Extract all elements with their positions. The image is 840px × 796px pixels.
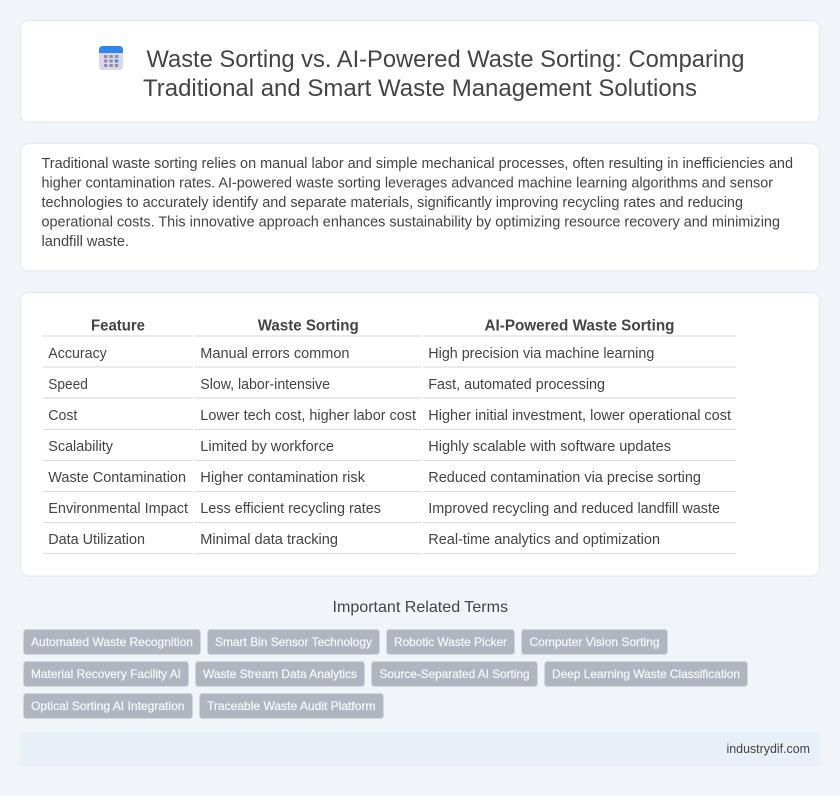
chip: Material Recovery Facility AI xyxy=(31,667,181,681)
chip xyxy=(372,662,538,686)
chip xyxy=(544,662,748,686)
row: Waste Contamination: Waste Contamination xyxy=(48,470,186,486)
icon: calendar grid xyxy=(99,46,123,70)
row: Environmental Impact: Less efficient recycling rates xyxy=(200,501,381,517)
text block: description: Traditional waste sorting relies on manual labor and simple mechanical processes, often resulting in inefficiencies and xyxy=(42,156,793,172)
text block: description: higher contamination rates. AI-powered waste sorting leverages advanced machine learning algorithms and sensor xyxy=(42,176,773,192)
row: Cost: Higher initial investment, lower operational cost xyxy=(428,408,731,424)
text block: description: operational costs. This innovative approach enhances sustainability by optimizing resource recovery and minimizing xyxy=(42,214,780,230)
text block: description: technologies to accurately identify and separate materials, significantly improving recycling rates and reducing xyxy=(42,195,743,211)
panel: description xyxy=(20,144,820,271)
text block: description xyxy=(42,156,793,250)
table header row: Waste Sorting xyxy=(258,318,359,335)
row: Cost: Lower tech cost, higher labor cost xyxy=(200,408,416,424)
row: Environmental Impact xyxy=(48,501,720,517)
row: Environmental Impact: Improved recycling and reduced landfill waste xyxy=(428,501,720,517)
row: Data Utilization: Real-time analytics and optimization xyxy=(428,532,660,548)
chip: Waste Stream Data Analytics xyxy=(203,667,357,681)
row: Speed: Slow, labor-intensive xyxy=(200,377,330,393)
row: Speed: Speed xyxy=(48,377,88,393)
row: Speed: Fast, automated processing xyxy=(428,377,605,393)
row: Scalability: Scalability xyxy=(48,439,114,455)
row: Scalability: Limited by workforce xyxy=(200,439,334,455)
chip xyxy=(24,662,188,686)
chip xyxy=(522,630,668,654)
chip: Deep Learning Waste Classification xyxy=(552,667,740,681)
chip: Optical Sorting AI Integration xyxy=(31,699,184,713)
row: Accuracy: Accuracy xyxy=(48,346,108,362)
row: Waste Contamination: Higher contamination risk xyxy=(200,470,366,486)
row: Data Utilization: Data Utilization xyxy=(48,532,145,548)
chip xyxy=(24,694,192,718)
text block: description: landfill waste. xyxy=(42,234,129,250)
row: Scalability: Highly scalable with software updates xyxy=(428,439,671,455)
chip xyxy=(208,630,380,654)
chip: Smart Bin Sensor Technology xyxy=(215,635,372,649)
row: Data Utilization: Minimal data tracking xyxy=(200,532,338,548)
row: Waste Contamination: Reduced contamination via precise sorting xyxy=(428,470,701,486)
title xyxy=(143,46,744,102)
row: Cost xyxy=(48,408,731,424)
row: Accuracy: Manual errors common xyxy=(200,346,350,362)
panel: header xyxy=(20,20,820,122)
row: Accuracy: High precision via machine learning xyxy=(428,346,654,362)
chip xyxy=(24,630,200,654)
table header row xyxy=(91,318,674,335)
heading: related terms: Important Related Terms xyxy=(332,599,508,616)
panel: related term chips xyxy=(24,630,748,718)
chip: Robotic Waste Picker xyxy=(394,635,507,649)
footer xyxy=(20,732,820,766)
chip: Automated Waste Recognition xyxy=(31,635,193,649)
row: Waste Contamination xyxy=(48,470,701,486)
chip: Source-Separated AI Sorting xyxy=(380,667,530,681)
panel: comparison table xyxy=(20,292,820,576)
chip xyxy=(386,630,514,654)
row: Data Utilization xyxy=(48,532,660,548)
table header row: AI-Powered Waste Sorting xyxy=(484,318,674,335)
row: Scalability xyxy=(48,439,671,455)
row: Accuracy xyxy=(48,346,654,362)
chip: Computer Vision Sorting xyxy=(530,635,660,649)
chip xyxy=(200,694,384,718)
row: Environmental Impact: Environmental Impact xyxy=(48,501,188,517)
row: Cost: Cost xyxy=(48,408,77,424)
chip xyxy=(196,662,364,686)
title: Traditional and Smart Waste Management Solutions xyxy=(143,75,697,102)
row: Speed xyxy=(48,377,605,393)
chip: Traceable Waste Audit Platform xyxy=(207,699,376,713)
footer: industrydif.com xyxy=(726,742,810,756)
table header row: Feature xyxy=(91,318,145,335)
title: Waste Sorting vs. AI-Powered Waste Sorting: Comparing xyxy=(146,46,744,73)
